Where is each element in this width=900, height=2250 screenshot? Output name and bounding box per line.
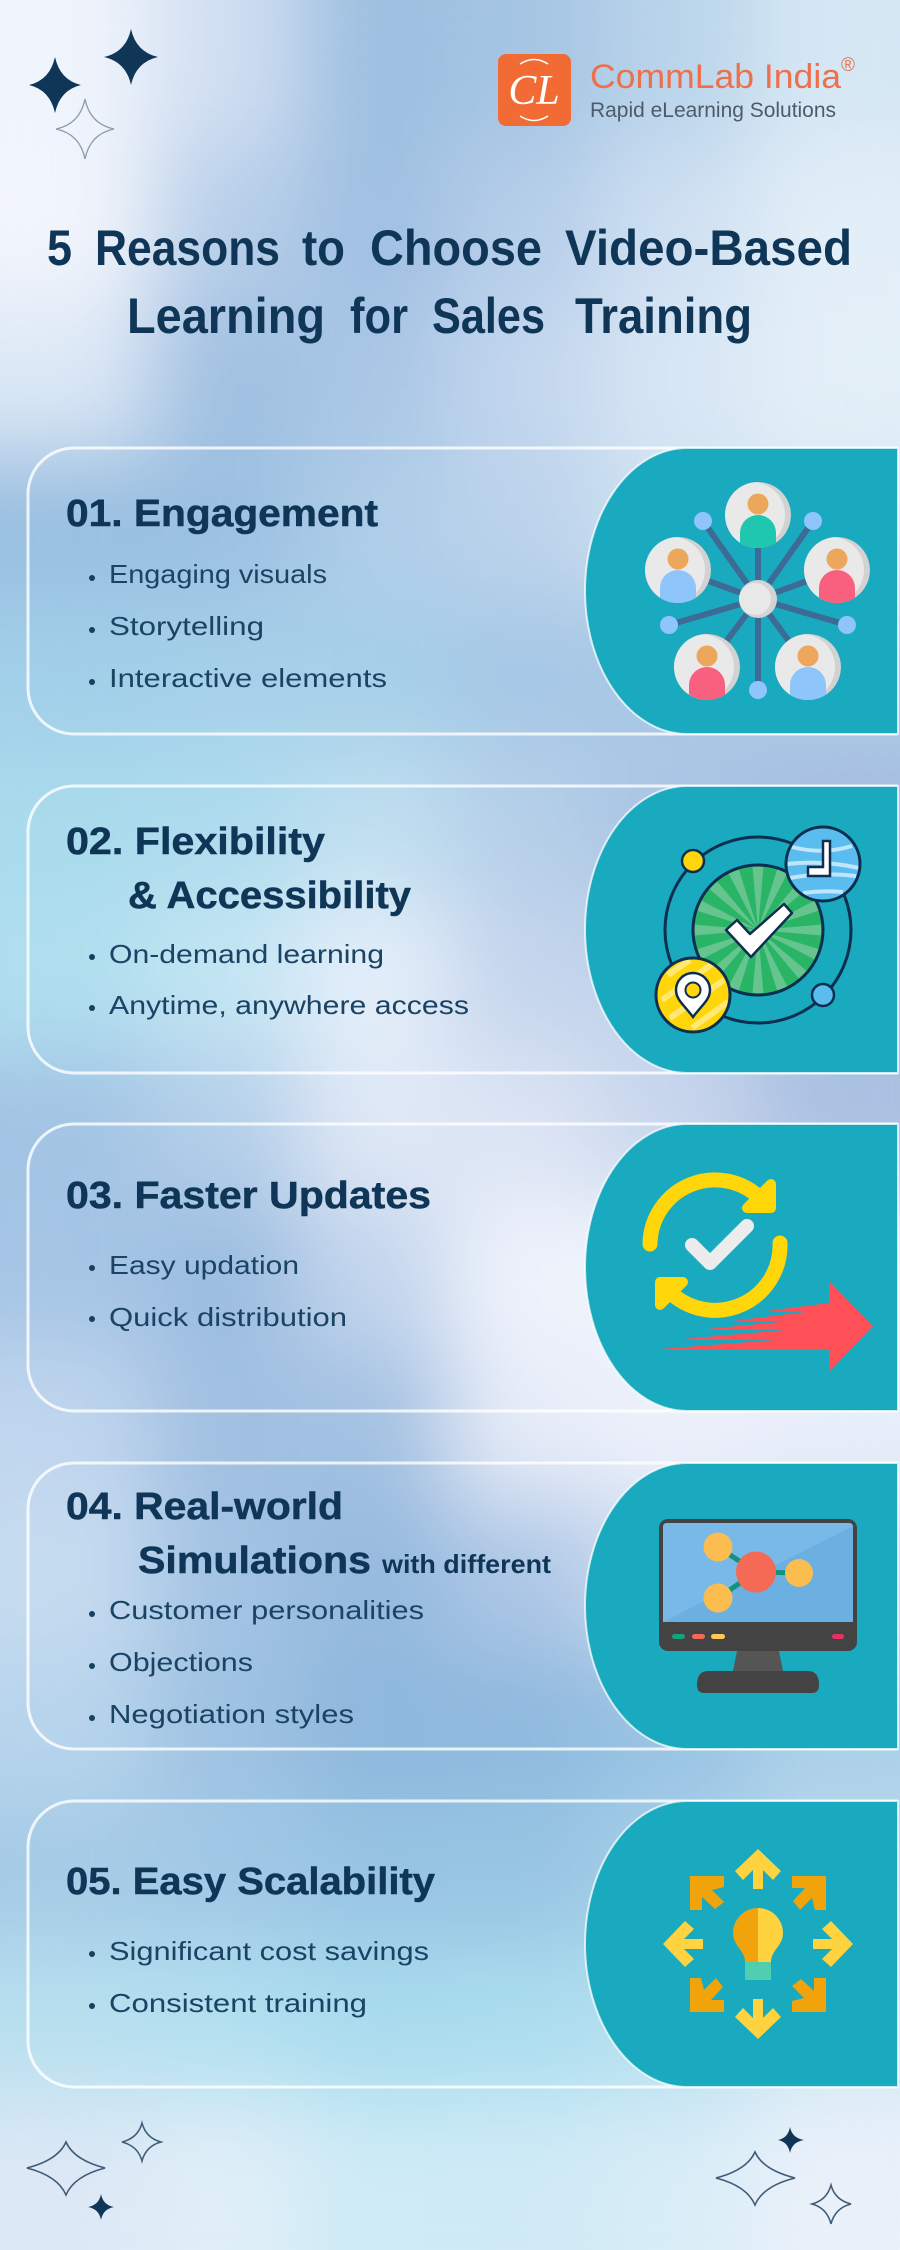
heading: Simulations	[138, 1540, 371, 1582]
teal icon panel	[585, 786, 898, 1073]
icon: monitor with network diagram	[659, 1519, 857, 1693]
heading: 05. Easy Scalability	[66, 1861, 435, 1903]
title: Choose	[370, 220, 542, 276]
bullet list: Negotiation styles	[109, 1699, 354, 1729]
icon: connected people network	[639, 482, 870, 707]
icon: light bulb with outward arrows	[663, 1849, 853, 2039]
bullet list: Interactive elements	[109, 663, 387, 693]
bullet list	[89, 1936, 429, 2018]
heading: with different	[381, 1549, 551, 1579]
heading	[66, 821, 411, 917]
panel: 03 Faster Updates	[28, 1124, 898, 1411]
bullet list: Engaging visuals	[109, 559, 327, 589]
title	[47, 220, 852, 344]
teal icon panel	[585, 448, 898, 734]
decorative stars: bottom left	[27, 2123, 161, 2220]
icon: sync arrows with check	[650, 1180, 780, 1310]
logo mark: CL	[508, 68, 560, 114]
bullet list: Easy updation	[109, 1250, 299, 1280]
bullet list	[89, 559, 387, 693]
heading	[66, 1486, 551, 1582]
teal icon panel	[585, 1124, 898, 1411]
title: to	[302, 220, 345, 276]
heading: 02. Flexibility	[66, 821, 325, 863]
title: Sales	[432, 288, 545, 344]
bullet list: Objections	[109, 1647, 253, 1677]
registered mark: ®	[841, 55, 855, 76]
bullet list	[89, 1250, 347, 1332]
bullet list: Significant cost savings	[109, 1936, 429, 1966]
icon: orbit with checkmark, clock and location pin	[656, 827, 860, 1032]
title: Training	[575, 288, 752, 344]
bullet list: Quick distribution	[109, 1302, 347, 1332]
heading: 01. Engagement	[66, 493, 378, 535]
panel: 01 Engagement	[28, 448, 898, 734]
bullet list	[89, 939, 469, 1020]
heading: & Accessibility	[128, 875, 411, 917]
heading: 03. Faster Updates	[66, 1175, 431, 1217]
panel: 05 Easy Scalability	[28, 1801, 898, 2087]
bullet list: Consistent training	[109, 1988, 367, 2018]
teal icon panel	[585, 1801, 898, 2087]
panel: 04 Real-world Simulations	[28, 1463, 898, 1749]
bullet list: Customer personalities	[109, 1595, 424, 1625]
title: Learning	[127, 288, 325, 344]
decorative stars: bottom right	[716, 2127, 851, 2224]
panel: 02 Flexibility & Accessibility	[28, 786, 898, 1073]
bullet list: Storytelling	[109, 611, 264, 641]
title: Video-Based	[565, 220, 852, 276]
logo: CommLab India	[498, 54, 855, 126]
icon: speed arrow	[648, 1281, 873, 1372]
heading: 04. Real-world	[66, 1486, 343, 1528]
decorative stars: top left	[29, 29, 158, 159]
logo tagline: Rapid eLearning Solutions	[590, 99, 836, 122]
title: Reasons	[95, 220, 280, 276]
teal icon panel	[585, 1463, 898, 1749]
title: 5	[47, 220, 72, 276]
bullet list	[89, 1595, 424, 1729]
bullet list: Anytime, anywhere access	[109, 990, 469, 1020]
logo mark	[498, 54, 571, 126]
title: for	[350, 288, 408, 344]
bullet list: On-demand learning	[109, 939, 384, 969]
logo wordmark: CommLab India	[590, 58, 841, 96]
